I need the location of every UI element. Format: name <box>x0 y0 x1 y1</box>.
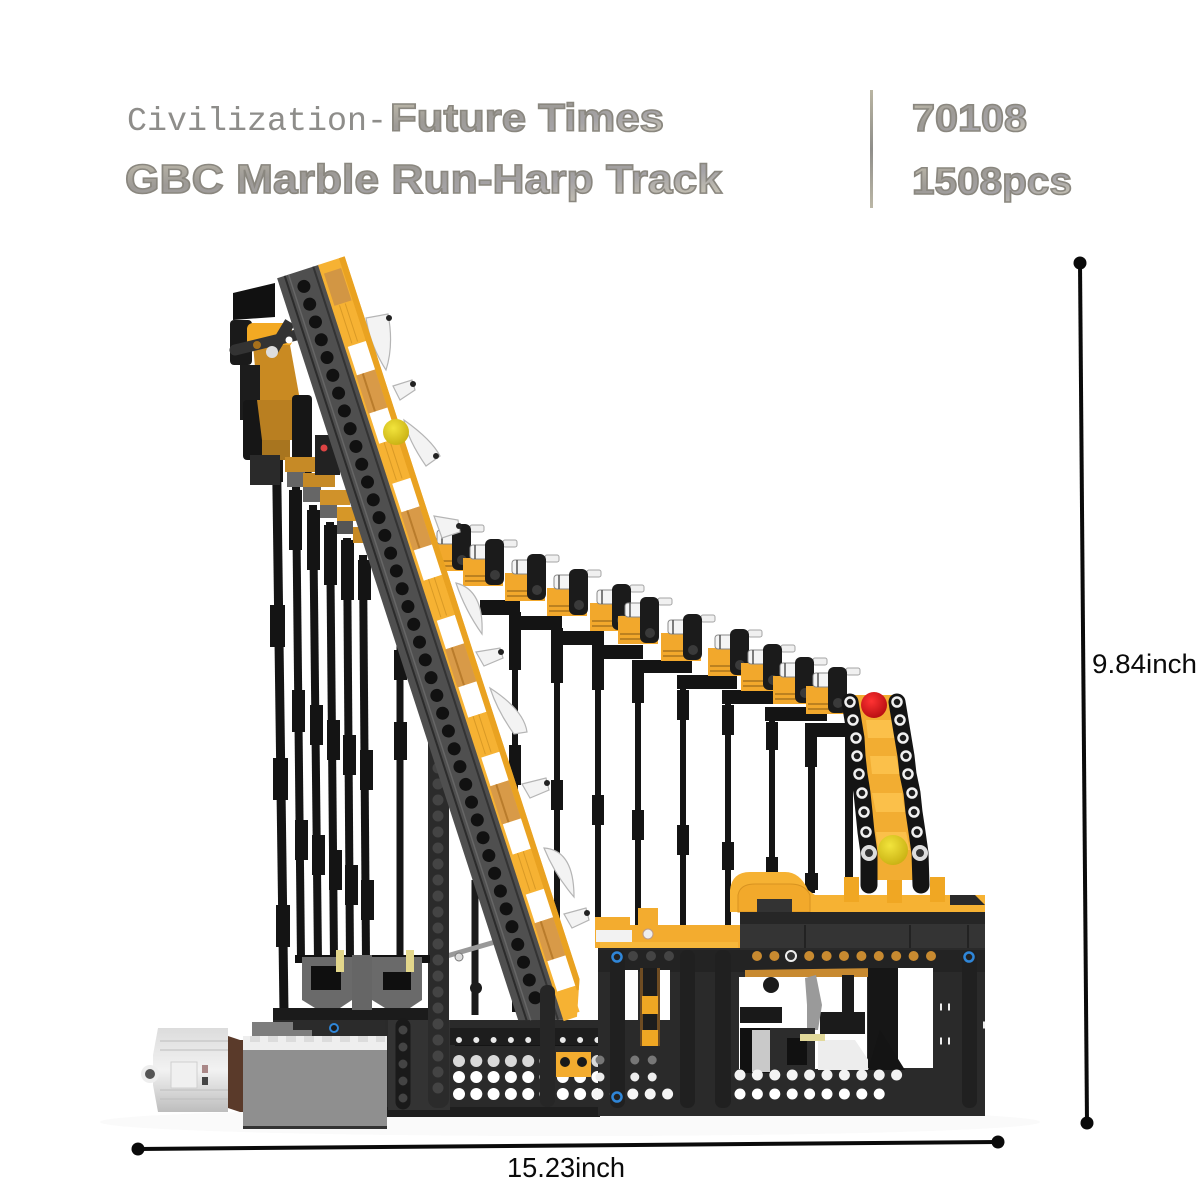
vertical liftarms on frame <box>610 950 977 1108</box>
yellow marble on inclined track <box>383 419 409 445</box>
piece count: 1508pcs <box>912 161 1072 203</box>
harp track: stepped orange bricks, levers and white axles <box>430 524 860 714</box>
grey studded beam <box>277 265 564 1033</box>
base left: dark frame with holes <box>273 1008 600 1117</box>
title line 2: GBC Marble Run-Harp Track <box>125 156 722 202</box>
battery box <box>243 1022 387 1129</box>
rear support rods <box>269 418 407 1012</box>
product: marble run model <box>143 256 985 1129</box>
title line 1 <box>127 97 664 140</box>
set number: 70108 <box>912 98 1027 140</box>
servo units <box>295 950 430 1010</box>
motor <box>143 1028 250 1112</box>
internal orange column <box>640 968 660 1046</box>
vertical liftarm <box>428 660 449 1108</box>
yellow marble at ramp foot <box>878 835 908 865</box>
right ramp and chain <box>846 695 926 885</box>
height dimension line <box>1074 256 1094 1130</box>
height label: 9.84inch <box>1092 649 1197 679</box>
harp rods and stepped crossbars <box>480 600 853 1012</box>
white bumpers on inclined track <box>366 314 589 928</box>
orange left platform <box>595 908 740 948</box>
blue connector pins <box>612 952 974 1102</box>
yellow track segments <box>318 256 590 1021</box>
ground shadow <box>100 1108 1040 1136</box>
small diagonal liftarm and orange brick <box>540 985 591 1107</box>
right base frame <box>598 912 985 1116</box>
width label: 15.23inch <box>507 1152 625 1183</box>
orange curved tiles on base <box>730 872 985 913</box>
left tower: motor head and stepped bricks <box>230 283 375 543</box>
internal gearbox and motor <box>740 968 905 1075</box>
title: product name and series <box>125 97 722 202</box>
title line 1: Future Times <box>390 97 664 140</box>
title line 1: Civilization- <box>127 103 387 140</box>
red marble <box>861 692 887 718</box>
bottom hole rows <box>598 1007 985 1094</box>
small rod and linkage behind inclined beam <box>440 880 495 1015</box>
bumper axle tips <box>386 315 590 916</box>
vertical divider <box>870 90 873 208</box>
width dimension line <box>132 1136 1004 1156</box>
rear window openings <box>624 968 933 1069</box>
inclined beam with yellow track <box>277 256 590 1034</box>
